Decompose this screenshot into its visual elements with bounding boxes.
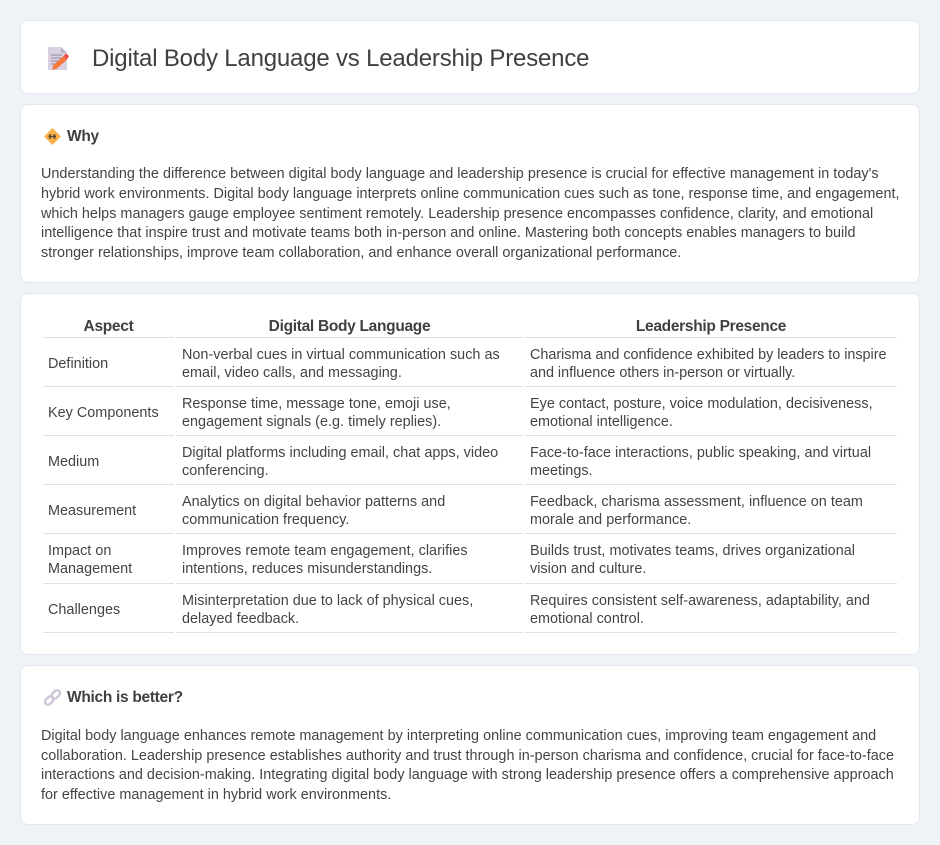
table header: Aspect (84, 318, 133, 335)
row: measurement: Analytics on digital behavior patterns and (182, 494, 445, 510)
header panel (20, 20, 920, 94)
why paragraph: hybrid work environments. Digital body language interprets online communication cues such as tone, response time, and engagement, (41, 186, 900, 202)
table header (43, 318, 897, 338)
heading: which is better: Which is better? (67, 689, 183, 706)
row: impact on management: intentions, reduces misunderstandings. (182, 561, 432, 577)
heading: why: Why (67, 128, 99, 145)
row: definition: Non-verbal cues in virtual communication such as (182, 347, 500, 363)
row: challenges (43, 593, 897, 633)
icon: chain link (44, 689, 61, 706)
why paragraph: stronger relationships, improve team collaboration, and enhance overall organizational performance. (41, 245, 681, 261)
table header: Digital Body Language (269, 318, 430, 335)
row: challenges: Misinterpretation due to lack of physical cues, (182, 593, 473, 609)
panel: why (20, 104, 920, 283)
why paragraph: intelligence that inspire trust and motivate teams both in-person and online. Mastering both concepts enables managers to build (41, 225, 856, 241)
panel: which is better (20, 665, 920, 825)
icon: memo with pencil (48, 47, 69, 70)
which is better paragraph (41, 728, 894, 803)
why paragraph: which helps managers gauge employee sentiment remotely. Leadership presence encompasses confidence, clarity, and emotional (41, 206, 873, 222)
row: impact on management: Management (48, 561, 132, 577)
row: medium: conferencing. (182, 463, 269, 479)
row: challenges: Requires consistent self-awareness, adaptability, and (530, 593, 870, 609)
row: medium: meetings. (530, 463, 593, 479)
row: medium: Digital platforms including email, chat apps, video (182, 445, 498, 461)
why paragraph (41, 166, 900, 261)
row: key components: Response time, message tone, emoji use, (182, 396, 451, 412)
row: medium (43, 445, 897, 485)
row: definition: email, video calls, and messaging. (182, 365, 402, 381)
row: challenges: emotional control. (530, 611, 644, 627)
row: impact on management: Builds trust, motivates teams, drives organizational (530, 543, 855, 559)
row: definition (43, 347, 897, 387)
row: measurement: Measurement (48, 503, 136, 519)
row: measurement: Feedback, charisma assessment, influence on team (530, 494, 863, 510)
row: medium: Medium (48, 454, 99, 470)
panel: comparison table (20, 293, 920, 655)
row: impact on management: Impact on (48, 543, 111, 559)
row: measurement: communication frequency. (182, 512, 349, 528)
row: key components (43, 396, 897, 436)
row: impact on management (43, 543, 897, 584)
row: impact on management: Improves remote team engagement, clarifies (182, 543, 468, 559)
which is better paragraph: interactions and decision-making. Integrating digital body language with strong leadership presence offers a comprehensive approach (41, 767, 894, 783)
which is better paragraph: collaboration. Leadership presence establishes authority and trust through in-person charisma and confidence, crucial for face-to-face (41, 748, 894, 764)
why paragraph: Understanding the difference between digital body language and leadership presence is crucial for effective management in today's (41, 166, 879, 182)
row: challenges: Challenges (48, 602, 120, 618)
icon: diamond sign (44, 128, 61, 145)
row: measurement: morale and performance. (530, 512, 691, 528)
which is better paragraph: Digital body language enhances remote management by interpreting online communication cues, improving team engagement and (41, 728, 876, 744)
table header: Leadership Presence (636, 318, 786, 335)
row: medium: Face-to-face interactions, public speaking, and virtual (530, 445, 871, 461)
row: definition: Charisma and confidence exhibited by leaders to inspire (530, 347, 886, 363)
title: Digital Body Language vs Leadership Presence (92, 45, 589, 72)
row: key components: Eye contact, posture, voice modulation, decisiveness, (530, 396, 873, 412)
row: impact on management: vision and culture. (530, 561, 646, 577)
row: measurement (43, 494, 897, 534)
row: definition: and influence others in-person or virtually. (530, 365, 795, 381)
row: challenges: delayed feedback. (182, 611, 299, 627)
row: definition: Definition (48, 356, 108, 372)
row: key components: engagement signals (e.g. timely replies). (182, 414, 441, 430)
row: key components: Key Components (48, 405, 159, 421)
row: key components: emotional intelligence. (530, 414, 673, 430)
which is better paragraph: for effective management in hybrid work environments. (41, 787, 391, 803)
